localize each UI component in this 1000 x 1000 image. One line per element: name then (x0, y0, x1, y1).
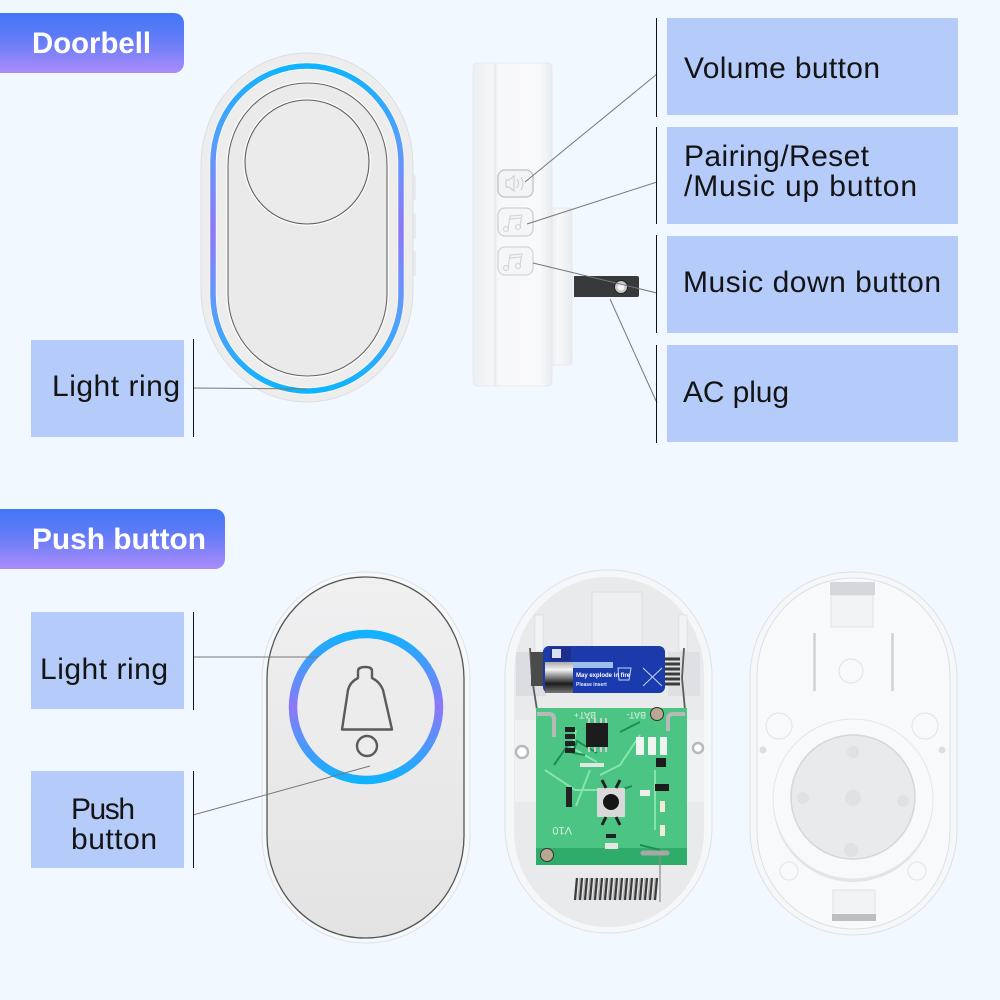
label: volume button (667, 18, 958, 115)
doorbell light ring (213, 66, 401, 391)
back cover lens ring (773, 719, 933, 882)
volume key (498, 170, 533, 197)
icon: push button back cover (750, 572, 957, 935)
circuit board (536, 708, 687, 865)
doorbell speaker circle (244, 99, 370, 225)
battery: Please insert (576, 682, 607, 688)
music up key (498, 208, 533, 236)
label: doorbell light ring (31, 340, 184, 437)
label: pairing reset music up button: /Music up button (684, 170, 917, 203)
icon: push button front view (262, 570, 470, 943)
label: pairing reset music up button (667, 127, 958, 224)
label: push button light ring (31, 612, 184, 709)
leader lines: doorbell (193, 18, 657, 443)
AC plug blade (574, 276, 639, 297)
heading: Doorbell: Doorbell (32, 27, 151, 60)
label: music down button (667, 236, 958, 333)
antenna spring (575, 856, 660, 902)
label: push button: button (71, 823, 157, 856)
icon: open push button with circuit board (505, 570, 712, 933)
label: volume button: Volume button (684, 52, 880, 85)
label: doorbell light ring: Light ring (52, 370, 180, 403)
doorbell inner panel (227, 82, 388, 377)
circuit board: BAT- (627, 710, 646, 720)
label: AC plug (667, 345, 958, 442)
label: music down button: Music down button (683, 266, 941, 299)
label: push button light ring: Light ring (40, 653, 168, 686)
battery: May explode in fire (576, 673, 631, 679)
icon: doorbell side view (473, 63, 639, 386)
circuit board: BAT+ (574, 710, 596, 720)
label: AC plug: AC plug (683, 376, 789, 409)
icon: doorbell front view (201, 53, 416, 402)
heading: Push button (0, 509, 225, 569)
leader lines: push button (193, 612, 370, 868)
push button face (267, 577, 464, 938)
circuit board: V10 (552, 824, 572, 836)
label: pairing reset music up button: Pairing/Reset (684, 140, 870, 173)
heading: Doorbell (0, 13, 184, 73)
heading: Push button: Push button (32, 523, 206, 556)
push button light ring (293, 634, 439, 780)
tact switch (597, 780, 625, 825)
battery (530, 646, 685, 710)
music down key (498, 247, 533, 275)
icon: bell (342, 667, 392, 756)
label: push button (31, 771, 184, 868)
label: push button: Push (71, 793, 135, 826)
